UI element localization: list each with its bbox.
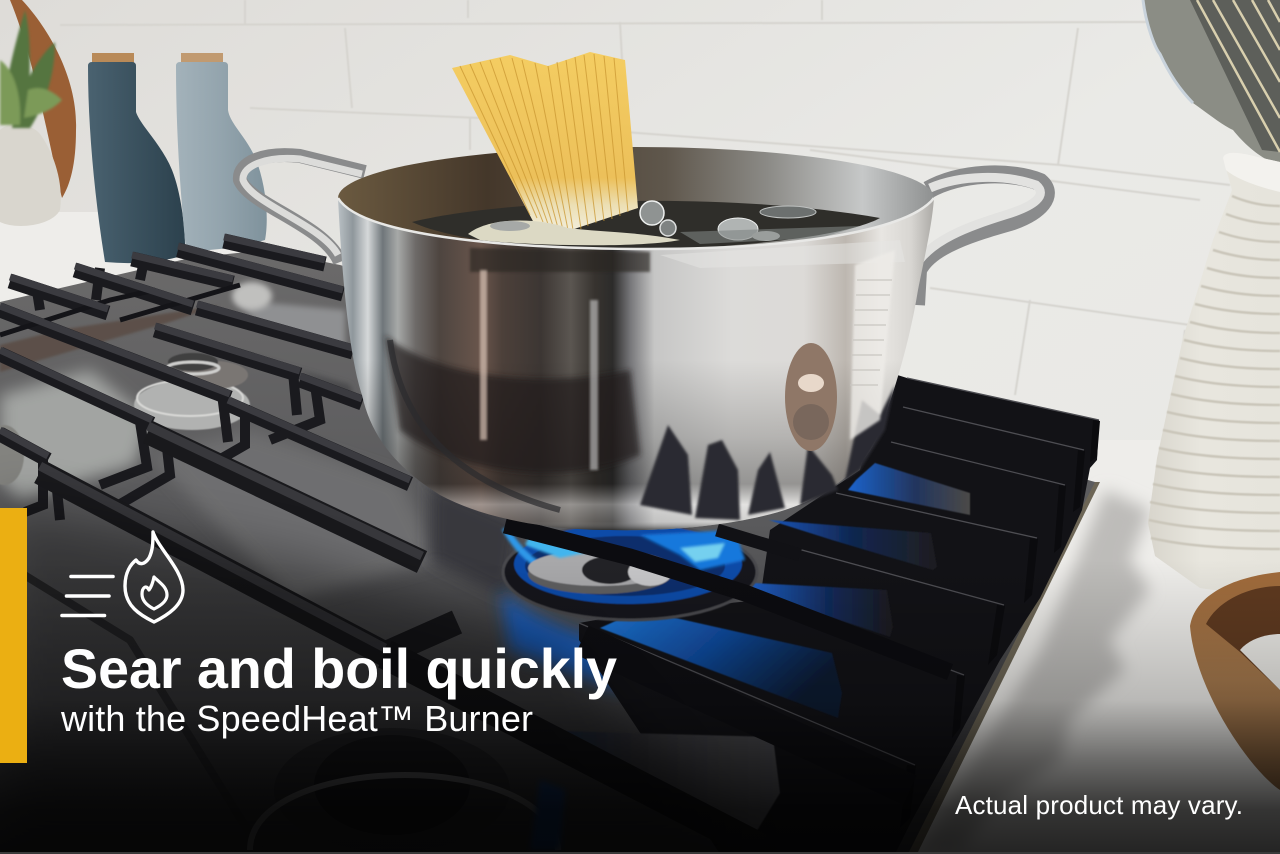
countertop: [0, 212, 1280, 854]
cooktop surface: [0, 250, 1095, 854]
front burner with flame ring: [503, 524, 757, 620]
back burner reflection: [232, 282, 272, 310]
bars crossing burner: [505, 525, 950, 790]
heading: Sear and boil quickly: [61, 638, 617, 700]
right handle: [913, 174, 1046, 305]
finger ends: [900, 420, 1100, 828]
stainless light reflections: [0, 370, 150, 500]
oval reflection: [785, 343, 837, 451]
rim edge: [338, 198, 934, 249]
vertical ribbed highlight: [850, 250, 895, 440]
bottom control knob: [250, 728, 565, 852]
lighter bar tops: [0, 237, 410, 480]
bottom right dark spikes: [640, 385, 895, 520]
right grate block: [512, 372, 1100, 854]
wooden salt bowl: [1190, 572, 1280, 790]
left burner: [0, 353, 250, 485]
ceramic crock: [1148, 153, 1280, 591]
plant and cutting board: [0, 0, 76, 226]
icon: speed flame: [62, 532, 183, 622]
boiling water: [412, 201, 880, 250]
surface windows between fingers: [848, 463, 970, 515]
utensils in crock: [1143, 0, 1280, 165]
pot inner: [338, 147, 934, 249]
dark bottom gradient overlay: [0, 500, 1280, 854]
brown reflection: [0, 305, 220, 372]
pepper mills: [88, 53, 267, 263]
disclaimer: Actual product may vary.: [955, 790, 1243, 820]
pot body: [338, 198, 934, 530]
left dark reflections: [385, 335, 640, 473]
accent bar: [0, 508, 27, 763]
cooktop tray edge: [905, 482, 1100, 854]
left grates: [0, 237, 760, 850]
bottom edge strip: [0, 852, 1280, 854]
finger top edges: [579, 378, 1099, 765]
subheading: with the SpeedHeat™ Burner: [60, 698, 533, 739]
spaghetti bundle: [452, 52, 638, 232]
blue flame glow on surface: [500, 590, 830, 715]
band below rim: [470, 248, 650, 272]
bubbles and froth: [468, 201, 860, 245]
pasta pot: [240, 52, 1046, 530]
left handle: [240, 155, 365, 262]
